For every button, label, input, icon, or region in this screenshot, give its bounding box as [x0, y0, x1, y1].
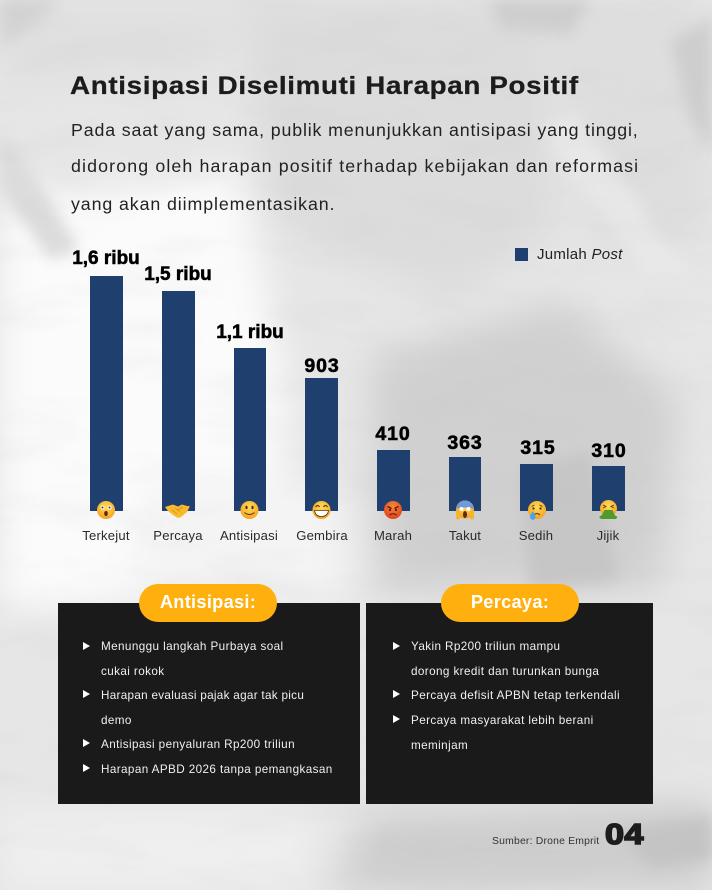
- bar: Jijik: Jijik: [597, 528, 619, 543]
- intro text block: yang akan diimplementasikan.: [71, 194, 335, 214]
- bar: Gembira: 903: [304, 355, 340, 377]
- icon: screaming face: [456, 500, 474, 520]
- bar: Sedih: [519, 437, 556, 543]
- bar: Percaya: 1,5 ribu: [144, 264, 212, 285]
- heading pill: Antisipasi: [139, 584, 277, 622]
- bar: Sedih: 315: [520, 437, 556, 459]
- legend: Jumlah Post: [537, 246, 623, 263]
- icon: grinning face: [312, 501, 330, 519]
- title: Antisipasi Diselimuti Harapan Positif: [70, 72, 579, 100]
- bar: Jijik: [591, 440, 627, 543]
- intro text block: Pada saat yang sama, publik menunjukkan antisipasi yang tinggi,: [71, 120, 639, 140]
- list item: Menunggu langkah Purbaya soal: [101, 640, 284, 653]
- icon: crying face: [528, 501, 546, 520]
- bar: Antisipasi: 1,1 ribu: [216, 322, 284, 343]
- bar: Percaya: Percaya: [153, 528, 203, 543]
- bar: Jijik: 310: [591, 440, 627, 462]
- intro text block: [71, 120, 639, 214]
- source note: Sumber: Drone Emprit: [492, 836, 599, 847]
- list item: [393, 714, 594, 752]
- panel background: [58, 603, 360, 804]
- bar: Terkejut: 1,6 ribu: [72, 248, 140, 269]
- list item: Harapan APBD 2026 tanpa pemangkasan: [101, 763, 333, 776]
- list item: demo: [101, 714, 132, 727]
- panel: Percaya: [366, 584, 653, 804]
- list item: Yakin Rp200 triliun mampu: [411, 640, 560, 653]
- bar: Antisipasi: [216, 322, 284, 543]
- list item: Percaya defisit APBN tetap terkendali: [411, 689, 620, 702]
- icon: slightly smiling face: [240, 501, 258, 519]
- page number: 04: [605, 819, 644, 851]
- intro text block: didorong oleh harapan positif terhadap kebijakan dan reformasi: [71, 156, 639, 176]
- emoji icons row: [97, 500, 618, 520]
- list item: [83, 640, 284, 678]
- list item: Percaya masyarakat lebih berani: [411, 714, 594, 727]
- bar: Marah: Marah: [374, 528, 412, 543]
- heading pill: Antisipasi: Antisipasi:: [160, 592, 256, 612]
- panel background: [366, 603, 653, 804]
- bar: Gembira: Gembira: [296, 528, 348, 543]
- bar: Takut: 363: [447, 432, 483, 454]
- list item: [83, 689, 304, 727]
- bar: Gembira: [296, 355, 348, 543]
- bar: Terkejut: [72, 248, 140, 543]
- panel: Antisipasi: [58, 584, 360, 804]
- bar: Takut: Takut: [449, 528, 481, 543]
- list item: meminjam: [411, 739, 468, 752]
- list item: Harapan evaluasi pajak agar tak picu: [101, 689, 304, 702]
- icon: astonished face: [97, 501, 115, 519]
- icon: angry face: [384, 501, 402, 519]
- icon: handshake: [165, 504, 190, 518]
- bar: Marah: 410: [375, 423, 411, 445]
- list item: Antisipasi penyaluran Rp200 triliun: [101, 738, 295, 751]
- bar: Takut: [447, 432, 483, 543]
- bar chart: [72, 248, 627, 543]
- list item: [393, 640, 599, 678]
- list item: cukai rokok: [101, 665, 165, 678]
- bar: Sedih: Sedih: [519, 528, 553, 543]
- list item: dorong kredit dan turunkan bunga: [411, 665, 599, 678]
- bar: Terkejut: Terkejut: [82, 528, 130, 543]
- bar: Marah: [374, 423, 412, 543]
- bar: Antisipasi: Antisipasi: [220, 528, 278, 543]
- icon: vomiting face: [599, 500, 618, 519]
- heading pill: Percaya: Percaya:: [471, 592, 549, 612]
- bar: Percaya: [144, 264, 212, 543]
- heading pill: Percaya: [441, 584, 579, 622]
